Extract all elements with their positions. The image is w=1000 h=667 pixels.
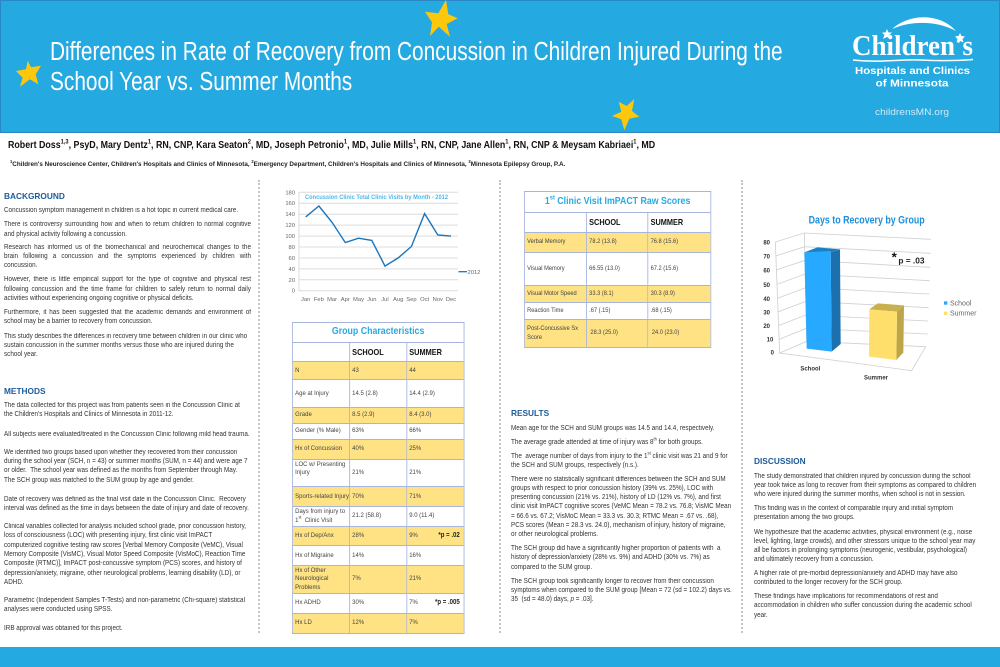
text: methods: computerized cognitive testing raw scores [Verbal Memory Composite (VeMC), Visual [4, 542, 243, 549]
table: group characteristics: Injury [295, 469, 310, 476]
text: methods: Parametric (Independent Samples T-Tests) and non-parametric (Chi-square) statistical [4, 597, 245, 604]
logo: Children's Hospitals and Clinics of Minnesota [852, 17, 974, 118]
text: discussion [754, 472, 976, 619]
table: group characteristics: 70% [352, 493, 364, 500]
text: background: school may be a barrier to recovery from concussion. [4, 318, 152, 325]
line chart: total clinic visits by month 2012: Apr [341, 297, 350, 303]
3D bar chart: days to recovery by group: Summer [950, 311, 977, 318]
table: group characteristics: Grade [295, 411, 312, 418]
3D bar chart: days to recovery by group: * [892, 249, 898, 264]
table: ImPACT raw scores: 30.3 (8.9) [651, 290, 675, 297]
text: methods: All subjects were evaluated/treated in the Concussion Clinic following mild head trauma. [4, 430, 250, 438]
header banner [0, 0, 1000, 133]
table: ImPACT raw scores: 28.3 (25.0) [590, 329, 618, 336]
table: group characteristics: 8.5 (2.9) [352, 411, 374, 418]
text: methods: interval was defined as the time in days between the date of injury and date of recovery. [4, 505, 249, 512]
logo: Children's Hospitals and Clinics of Minnesota: Hospitals and Clinics [855, 65, 970, 77]
table: group characteristics: 40% [352, 445, 364, 452]
table: group characteristics: Hx ADHD [295, 599, 321, 606]
text: background: Concussion symptom management in children is a hot topic in current medical care. [4, 207, 238, 214]
text: results: The average grade attended at time of injury was 8th for both groups. [511, 437, 703, 446]
text: results: groups with respect to prior concussion history (39% vs. 25%), LOC with [511, 485, 713, 492]
text: discussion: contributed to the longer recovery for the SCH group. [754, 579, 902, 586]
line chart: total clinic visits by month 2012: 40 [289, 267, 295, 273]
text: methods: Memory Composite (VisMC), Visual Motor Speed Composite (VisMoC), Reaction Time [4, 551, 245, 558]
text: methods: during the school year (SCH, n = 43) or summer months (SUM, n = 44) and were age 7 [4, 458, 248, 465]
text: methods: loss of consciousness (LOC) with presenting injury, first clinic visit ImPACT [4, 532, 212, 539]
table: ImPACT raw scores: 67.2 (15.6) [651, 265, 678, 272]
table: group characteristics: 63% [352, 427, 364, 434]
text: discussion: level, lighting, large crowds), and other stressors unique to the school year may [754, 538, 975, 545]
3D bar chart: days to recovery by group [763, 214, 977, 382]
text: methods: the Children's Hospitals and Clinics of Minnesota in 2011-12. [4, 411, 174, 418]
text: methods: depression/anxiety, migraine, other neurological problems, learning disability (LD), or [4, 570, 240, 577]
text: methods: Date of recovery was defined as the final visit date in the Concussion Clinic. Recovery [4, 496, 246, 502]
line chart: total clinic visits by month 2012: 140 [285, 212, 295, 218]
table: ImPACT raw scores: 1st Clinic Visit ImPACT Raw Scores [545, 194, 690, 207]
text: results: The SCH group did have a significantly higher proportion of patients with a [511, 545, 721, 552]
authors: Robert Doss1,3, PsyD, Mary Dentz1, RN, CNP, Kara Seaton2, MD, Joseph Petronio1, MD, Julie Mills1, RN, CNP, Jane Allen1, RN, CNP & Meysam Kabriaei1, MD [8, 138, 655, 150]
line chart: total clinic visits by month 2012: 160 [285, 201, 295, 207]
line chart: total clinic visits by month 2012: 80 [289, 245, 295, 251]
text: results: the SCH and SUM groups, respectively (n.s.). [511, 462, 639, 469]
text: background: brain following a concussion and the symptoms experienced by children with [4, 253, 251, 260]
text: discussion: all be factors in prolonging symptoms (neurogenic, vestibular, psychological) [754, 547, 967, 554]
heading: methods: METHODS [4, 386, 46, 396]
table: group characteristics: Group Characteristics [332, 326, 424, 337]
3D bar chart: days to recovery by group: School [950, 300, 972, 307]
line chart: total clinic visits by month 2012: Jul [381, 297, 389, 303]
line chart: total clinic visits by month 2012: Jun [367, 297, 376, 303]
table: ImPACT raw scores: 78.2 (13.8) [589, 238, 617, 245]
text: discussion: These findings have implications for recommendations of rest and [754, 593, 938, 600]
table: group characteristics: Hx of Other [295, 567, 326, 574]
table: group characteristics: Neurological [295, 575, 328, 582]
table: group characteristics: Days from injury to [295, 508, 345, 515]
table: group characteristics: 30% [352, 599, 364, 606]
table: group characteristics: 21% [409, 469, 421, 476]
table: group characteristics: Hx of Migraine [295, 552, 334, 559]
table: group characteristics: SCHOOL [352, 347, 384, 357]
table: ImPACT raw scores: SUMMER [651, 217, 683, 227]
table: group characteristics: 44 [409, 367, 416, 374]
text: results: = 66.6 vs. 67.2; VisMoC Mean = 33.3 vs. 30.3; RTMC Mean = .67 vs. .68), [511, 513, 718, 520]
table: group characteristics: 9.0 (11.4) [409, 512, 434, 519]
text: discussion: who were injured during the summer months, when school is not in session. [754, 491, 966, 498]
table: group characteristics: *p = .02 [438, 532, 460, 539]
table: group characteristics: Age at Injury [295, 390, 329, 397]
table: group characteristics: 25% [409, 445, 421, 452]
table: group characteristics: Hx of Dep/Anx [295, 532, 334, 539]
table: group characteristics: 7% [352, 575, 361, 582]
table: ImPACT raw scores: Verbal Memory [527, 238, 565, 245]
table: ImPACT raw scores [524, 190, 711, 348]
line chart: total clinic visits by month 2012: Sep [406, 297, 417, 303]
line chart: total clinic visits by month 2012: Oct [420, 297, 429, 303]
text: background: concussion. [4, 262, 37, 269]
table: group characteristics: Hx of Concussion [295, 445, 342, 452]
text: background: following concussion and the time frame for children to safely return to normal daily [4, 286, 251, 293]
text: methods: We identified two groups based upon whether they recovered from their concussion [4, 449, 237, 456]
table: group characteristics: Problems [295, 584, 320, 591]
table: group characteristics [292, 322, 464, 634]
3D bar chart: days to recovery by group: 30 [763, 310, 771, 316]
table: ImPACT raw scores: Visual Motor Speed [527, 290, 577, 297]
table: ImPACT raw scores: .68 (.15) [651, 307, 672, 314]
table: group characteristics: LOC w/ Presenting [295, 461, 345, 468]
table: ImPACT raw scores: Score [527, 334, 542, 341]
3D bar chart: days to recovery by group: 10 [767, 337, 774, 343]
text: methods: The data collected for this project was from patients seen in the Concussion Clinic at [4, 402, 240, 409]
table: group characteristics: SUMMER [409, 347, 442, 357]
text: discussion: year took twice as long to recover from their symptoms as compared to children [754, 482, 976, 489]
text: discussion: This finding was in the context of comparable injury and initial symptom [754, 505, 953, 512]
table: group characteristics: Hx LD [295, 619, 312, 626]
table: group characteristics: 14.4 (2.9) [409, 390, 435, 397]
text: background: sustain concussion in the summer months versus those who are injured during the [4, 342, 234, 349]
line chart: total clinic visits by month 2012: Jan [301, 297, 310, 303]
table: ImPACT raw scores: 24.0 (23.0) [652, 329, 679, 336]
line chart: total clinic visits by month 2012: Nov [433, 297, 443, 303]
table: group characteristics: 28% [352, 532, 364, 539]
text: discussion: presentation among the two groups. [754, 514, 855, 521]
affiliations: 1Children's Neuroscience Center, Children's Hospitals and Clinics of Minnesota, 2Emergency Department, Children's Hospitals and Clinics of Minnesota, 3Minnesota Epilepsy Group, P.A. [10, 158, 565, 168]
table: group characteristics: 7% [409, 619, 418, 626]
table: group characteristics: 66% [409, 427, 421, 434]
table: group characteristics: 43 [352, 367, 359, 374]
table: ImPACT raw scores: 33.3 (8.1) [589, 290, 614, 297]
line chart: total clinic visits by month 2012: 0 [292, 289, 295, 295]
text: methods: Clinical variables collected for analysis included school grade, prior concussion history, [4, 523, 246, 530]
table: group characteristics: N [295, 367, 299, 374]
text: methods: IRB approval was obtained for this project. [4, 625, 123, 632]
text: background: Research has informed us of the biomechanical and neurochemical changes to the [4, 244, 251, 251]
heading: background: BACKGROUND [4, 190, 65, 200]
3D bar chart: days to recovery by group: 80 [763, 240, 771, 246]
line chart: total clinic visits by month 2012: 2012 [468, 270, 480, 276]
text: background: There is controversy surrounding how and when to return children to normal cognitive [4, 221, 251, 228]
3D bar chart: days to recovery by group: p = .03 [898, 255, 925, 265]
text: discussion: The study demonstrated that children injured by concussion during the school [754, 472, 971, 480]
line chart: total clinic visits by month 2012: 100 [285, 234, 295, 240]
table: group characteristics: Gender (% Male) [295, 427, 341, 434]
text: background: school year. [4, 351, 38, 358]
table: group characteristics: 21% [409, 575, 421, 582]
table: group characteristics: Sports-related Injury [295, 493, 349, 500]
text: discussion: A higher rate of pre-morbid depression/anxiety and ADHD may have also [754, 570, 958, 577]
text: results [511, 425, 732, 603]
icon: decorative stars [16, 0, 640, 130]
3D bar chart: days to recovery by group: Summer [864, 376, 889, 382]
table: ImPACT raw scores: Post-Concussive Sx [527, 325, 578, 332]
title: School Year vs. Summer Months [50, 68, 352, 96]
3D bar chart: days to recovery by group: 20 [763, 324, 771, 330]
line chart: total clinic visits by month 2012: Concussion Clinic Total Clinic Visits by Month - 2012 [305, 194, 448, 201]
text: results: history of depression/anxiety (28% vs. 9%) and ADHD (30% vs. 7%) as [511, 554, 710, 561]
table: group characteristics: 16% [409, 552, 421, 559]
table: ImPACT raw scores: .67 (.15) [589, 307, 610, 314]
line chart: total clinic visits by month 2012: Mar [327, 297, 337, 303]
text: results: PCS scores (Mean = 28.3 vs. 24.0), mechanism of injury, history of migraine, [511, 522, 725, 529]
3D bar chart: days to recovery by group: 60 [763, 269, 771, 275]
heading: discussion: DISCUSSION [754, 456, 806, 466]
table: group characteristics: 7% [409, 599, 418, 606]
table: group characteristics: 9% [409, 532, 418, 539]
title [50, 38, 783, 96]
line chart: total clinic visits by month 2012: 60 [289, 256, 295, 262]
footer band [0, 647, 1000, 667]
line chart: total clinic visits by month 2012: May [353, 297, 364, 303]
text: results: compared to the SUM group. [511, 564, 592, 571]
text: background: and physical activity following a concussion. [4, 231, 127, 238]
text: results: presenting concussion (21% vs. 21%), history of LD (12% vs. 7%), and first [511, 494, 721, 501]
heading: results: RESULTS [511, 408, 549, 418]
line chart: total clinic visits by month 2012: 20 [289, 278, 295, 284]
text: methods: The SCH group was matched to the SUM group by age and gender. [4, 477, 194, 484]
text: methods: ADHD. [4, 579, 24, 586]
text: discussion: year. [754, 612, 768, 619]
table: ImPACT raw scores: Visual Memory [527, 265, 565, 272]
text: results: The average number of days from injury to the 1st clinic visit was 21 and 9 for [511, 450, 728, 460]
text: discussion: accommodation in children who suffer concussion during the academic school [754, 602, 972, 609]
table: group characteristics: 12% [352, 619, 364, 626]
line chart: total clinic visits by month 2012: 120 [285, 223, 295, 229]
logo: Children's Hospitals and Clinics of Minnesota: of Minnesota [876, 78, 949, 90]
table: group characteristics: 8.4 (3.0) [409, 411, 431, 418]
text: results: There were no statistically significant differences between the SCH and SUM [511, 476, 726, 482]
3D bar chart: days to recovery by group: Days to Recovery by Group [809, 214, 925, 226]
text: methods [4, 402, 250, 632]
table: group characteristics: 21% [352, 469, 364, 476]
text: discussion: and ultimately recovery from a concussion. [754, 556, 874, 563]
table: ImPACT raw scores: 66.55 (13.0) [589, 265, 620, 272]
text: background: However, there is little empirical support for the type of cognitive and physical rest [4, 276, 251, 283]
text: background: Furthermore, it has been suggested that the academic demands and environment of [4, 308, 251, 316]
table: group characteristics: 21.2 (58.8) [352, 512, 381, 519]
text: results: or other neurological problems. [511, 531, 598, 538]
logo: Children's Hospitals and Clinics of Minnesota: childrensMN.org [875, 107, 949, 118]
line chart: total clinic visits by month 2012 [285, 190, 480, 303]
text: results: symptoms when compared to the SUM group [Mean = 72 (sd = 102.2) days vs. [511, 587, 732, 594]
title: Differences in Rate of Recovery from Concussion in Children Injured During the [50, 38, 783, 66]
text: methods: or older. The school year was defined as the months from September through May. [4, 467, 237, 474]
text: methods: analyses were conducted using SPSS. [4, 606, 112, 613]
text: results: clinic visit ImPACT cognitive scores (VeMC Mean = 78.2 vs. 76.8; VisMC Mean [511, 503, 731, 510]
table: group characteristics: 1st Clinic Visit [295, 514, 332, 524]
text: results: Mean age for the SCH and SUM groups was 14.5 and 14.4, respectively. [511, 425, 714, 432]
table: group characteristics: 14.5 (2.8) [352, 390, 378, 397]
text: background: activities without experiencing ongoing cognitive or physical deficits. [4, 295, 194, 302]
table: ImPACT raw scores: 76.8 (15.6) [651, 238, 678, 245]
table: group characteristics: *p = .005 [435, 599, 460, 606]
line chart: total clinic visits by month 2012: 180 [285, 190, 295, 196]
line chart: total clinic visits by month 2012: Aug [393, 297, 403, 303]
logo: Children's Hospitals and Clinics of Minnesota: Children's [852, 30, 973, 62]
3D bar chart: days to recovery by group: School [800, 366, 821, 372]
text: methods: Composite (RTMC)], ImPACT post-concussive symptom (PCS) scores, and history of [4, 560, 242, 567]
text: background: This study describes the differences in recovery time between children in our clinic who [4, 332, 247, 340]
line chart: total clinic visits by month 2012: Dec [446, 297, 456, 303]
line chart: total clinic visits by month 2012: Feb [314, 297, 324, 303]
table: ImPACT raw scores: Reaction Time [527, 307, 563, 314]
text: discussion: We hypothesize that the academic activities, physical environment (e.g., noise [754, 528, 972, 536]
table: ImPACT raw scores: SCHOOL [589, 217, 621, 227]
text: background [4, 207, 251, 358]
table: group characteristics: 14% [352, 552, 364, 559]
text: results: 35 (sd = 48.0) days, p = .03]. [511, 596, 594, 603]
table: group characteristics: 71% [409, 493, 421, 500]
3D bar chart: days to recovery by group: 70 [763, 254, 771, 260]
3D bar chart: days to recovery by group: 0 [771, 351, 775, 357]
text: results: The SCH group took significantly longer to recover from their concussion [511, 578, 714, 584]
3D bar chart: days to recovery by group: 50 [763, 283, 771, 289]
3D bar chart: days to recovery by group: 40 [763, 297, 771, 303]
